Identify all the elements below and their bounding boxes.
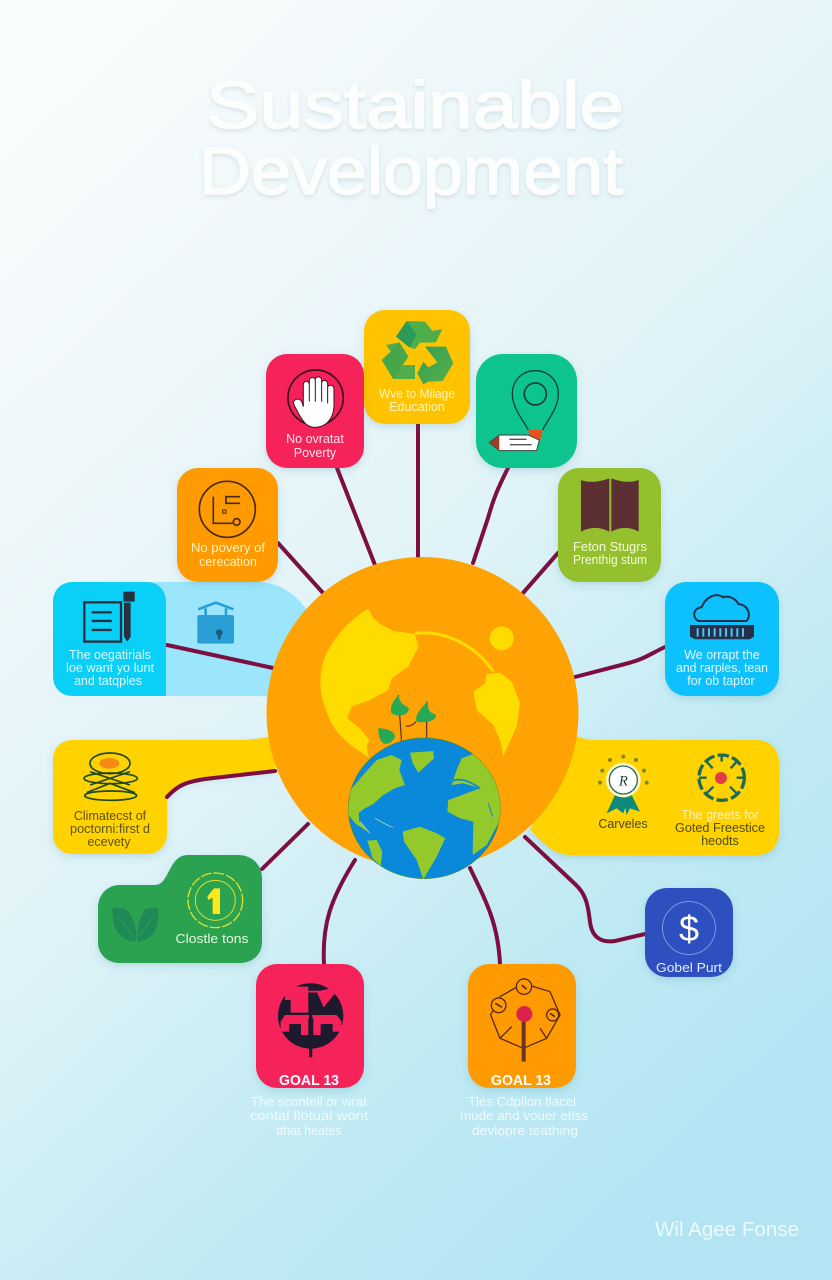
icon: blue lock house [197,603,234,644]
card: recycle education: Education [389,400,445,414]
card: no poverty: Poverty [294,446,337,460]
card: orange no poverty of education [177,468,278,582]
card: cyan left notebook: The oegatirials [69,648,151,662]
card: cyan right cloud [665,582,779,696]
card: cyan left notebook [53,582,166,696]
card: no poverty [266,354,364,468]
globe [347,738,503,879]
icon: notebook and pen [84,592,135,642]
card: red goal 13 [256,964,364,1089]
caption: red goal: contal llotual wont [250,1109,369,1123]
card: blue global purt: Gobel Purt [656,960,722,975]
text: yellow right card: The greets for [681,808,759,822]
text: yellow right card: Goted Freestice [675,821,765,835]
caption: red goal: The scontell or wrat [251,1095,368,1109]
icon: dollar circle: $ [679,908,699,949]
sprouts [378,695,436,744]
card: recycle education: Wve to Milage [379,387,455,401]
card: cyan left notebook: loe want yo lunt [66,661,155,675]
yellow world map [320,609,520,757]
card: cyan right cloud: for ob taptor [687,674,755,688]
title [199,68,624,209]
card: no poverty: No ovratat [286,432,344,446]
card: cyan right cloud: and rarples, tean [676,661,768,675]
card: orange goal 13: GOAL 13 [491,1072,551,1089]
caption: orange goal: Tles Cdpllon tlacel [468,1095,576,1109]
text: yellow left card: poctorni:first d [70,822,150,836]
icon: dark circle emblem [278,983,343,1057]
caption: orange goal: devlopre teathing [472,1124,578,1138]
icon: recycle [382,321,453,384]
card: olive book: Feton Stugrs [573,540,647,554]
icon: stacked rings [84,753,137,800]
icon: leaves [113,907,158,942]
footer brand: Wil Agee Fonse [655,1219,799,1241]
text: yellow left card: ecevety [87,835,131,849]
caption: orange goal [460,1095,588,1138]
caption: red goal [250,1095,369,1138]
card: green climate action [98,855,262,963]
text: yellow right card: heodts [701,834,739,848]
card: olive book [558,468,661,582]
title: Development [199,134,623,209]
icon: number one badge [188,873,243,928]
text: yellow left card [70,753,150,849]
card: cyan right cloud: We orrapt the [684,648,760,662]
caption: orange goal: mude and vouer etlss [460,1109,588,1123]
card: cyan left notebook: and tatqples [74,674,142,688]
icon: circle chart [199,481,255,537]
icon: tree network [491,979,560,1062]
panel: yellow right card [530,735,779,855]
text: yellow left card: Climatecst of [74,809,147,823]
icon: open book [581,478,639,532]
connector lines [167,424,665,964]
caption: red goal: tthat heates [276,1124,342,1138]
card: olive book: Prenthig stum [573,553,647,567]
icon: pin and pencil [489,371,558,451]
icon: cloud and server [690,595,754,639]
card: orange goal 13 [468,964,576,1089]
icon: hand [288,370,343,427]
icon: award ribbon: R [618,774,628,790]
panel: yellow left card [53,736,275,854]
card: innovation pin [476,354,577,468]
card: orange no poverty of education: No povery of [191,541,266,555]
panel: light blue extension [120,582,310,705]
title: Sustainable [206,68,624,143]
text: yellow right card [598,755,765,848]
card: blue global purt [645,888,733,977]
icon: award ribbon [598,755,649,815]
card: red goal 13: GOAL 13 [279,1072,339,1089]
text: yellow right card: Carveles [598,817,648,831]
card: green climate action: Clostle tons [176,931,249,946]
icon: people circle [699,755,744,800]
card: recycle education [364,310,470,424]
card: orange no poverty of education: cerecation [199,555,257,569]
central sun circle [266,557,578,879]
